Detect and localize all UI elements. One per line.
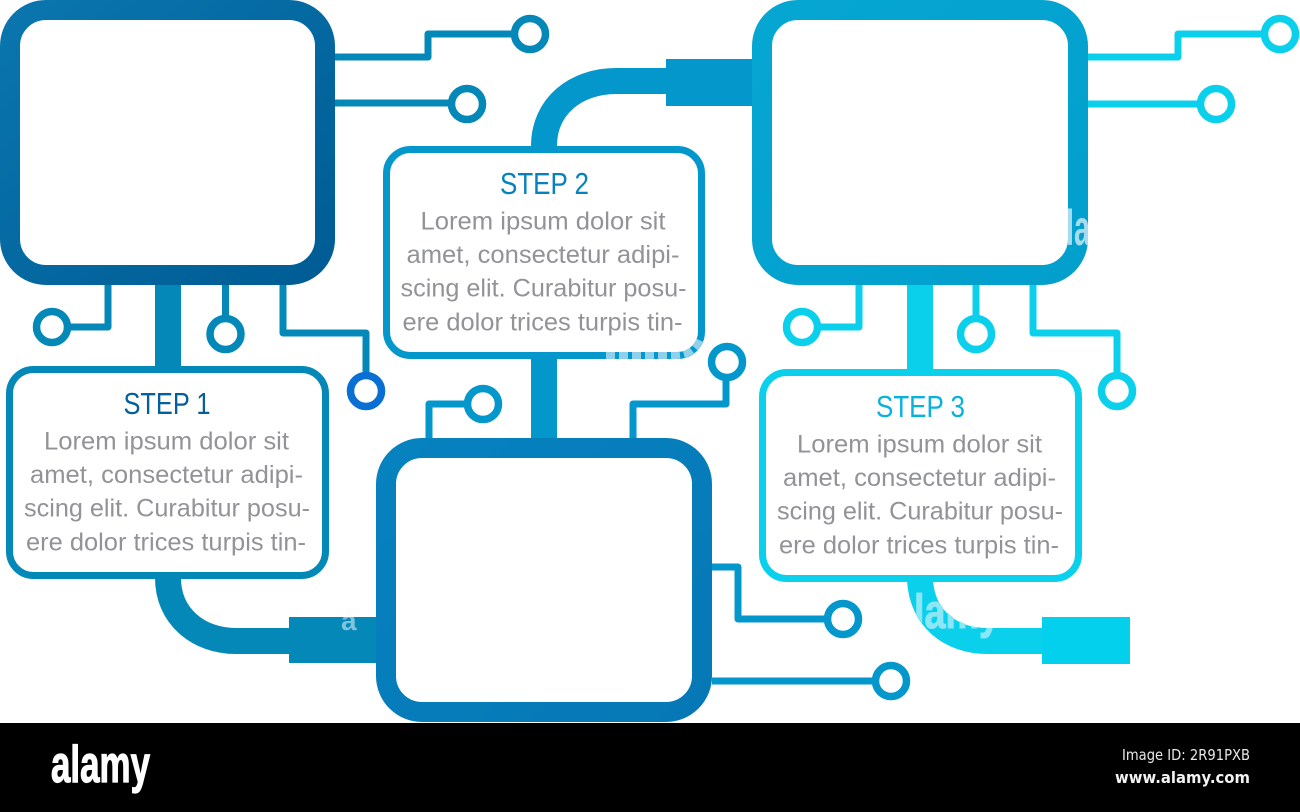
heading: step 2: STEP 2 <box>500 166 589 201</box>
icon: node circle bottom right <box>1102 376 1132 406</box>
panel: image square 2 <box>386 448 702 712</box>
connector: stem from step 2 to square 2 <box>531 356 557 442</box>
text block: step 1 body: ere dolor trices turpis tin- <box>26 528 306 556</box>
connector: pipe from step 1 to square 2 <box>168 576 300 641</box>
text block: step 3 body: scing elit. Curabitur posu- <box>777 498 1063 526</box>
text block: step 2 body: amet, consectetur adipi- <box>406 241 680 269</box>
text block: image id: Image ID: 2R91PXB <box>1122 746 1250 764</box>
panel: step 3 card <box>762 372 1078 578</box>
connector: step 1 traces <box>68 34 515 375</box>
panel: step 1 card <box>10 370 326 576</box>
text block: step 2 body: ere dolor trices turpis tin- <box>402 308 682 336</box>
panel: image square 1 <box>10 10 325 275</box>
connector: plug block step 1 <box>289 617 379 663</box>
icon: node circle bottom middle <box>960 318 992 350</box>
heading: step 3: STEP 3 <box>876 389 965 424</box>
panel: step 2 group <box>386 59 906 712</box>
panel: step 1 group <box>10 10 546 663</box>
panel: step 2 card <box>386 150 702 356</box>
text block: step 1 body: amet, consectetur adipi- <box>30 461 303 489</box>
text block: website: www.alamy.com <box>1115 768 1250 787</box>
text block: step 3 body: Lorem ipsum dolor sit <box>797 430 1042 458</box>
text block: step 3 body <box>777 430 1063 560</box>
icon: node circle bottom middle <box>210 318 241 350</box>
text block: step 2 body <box>400 208 686 336</box>
panel: image square 3 <box>762 10 1078 275</box>
icon: node circle top right 1 <box>514 18 546 50</box>
connector: pipe from step 2 to square 3 <box>544 81 680 148</box>
text block: step 3 body: amet, consectetur adipi- <box>783 464 1056 492</box>
text block: step 1 body: scing elit. Curabitur posu- <box>24 494 310 522</box>
footer: black stock photo bar <box>0 723 1300 812</box>
icon: node circle right 1 <box>828 604 858 634</box>
text block: watermark fragment on pipe: lamy <box>914 586 1000 639</box>
panel: step 3 group <box>762 10 1296 664</box>
connector: stem from square 3 to step 3 <box>907 283 933 373</box>
icon: node circle bottom left <box>36 312 68 342</box>
text block: alamy logo: alamy <box>51 736 150 794</box>
icon: node circle top right 2 <box>452 88 482 120</box>
connector: step 2 traces <box>429 378 875 681</box>
connector: stem from square 1 to step 1 <box>155 283 181 369</box>
heading: step 1: STEP 1 <box>124 386 210 421</box>
icon: node circle top right <box>712 346 742 378</box>
connector: plug block step 2 <box>666 59 756 106</box>
icon: node circle bottom left <box>786 312 818 342</box>
text block: step 2 body: scing elit. Curabitur posu- <box>400 274 686 302</box>
icon: node circle bottom right <box>350 376 382 406</box>
connector: pipe from step 3 <box>920 580 1050 641</box>
connector: plug block step 3 <box>1042 617 1130 664</box>
icon: node circle top left <box>468 388 498 420</box>
text block: step 3 body: ere dolor trices turpis tin- <box>779 532 1059 560</box>
connector: step 3 traces <box>818 34 1264 375</box>
text block: watermark fragment on square 3: la <box>1066 200 1091 256</box>
text block: step 1 body: Lorem ipsum dolor sit <box>44 428 289 456</box>
text block: step 2 body: Lorem ipsum dolor sit <box>420 208 666 236</box>
icon: node circle top right 1 <box>1264 18 1296 50</box>
icon: node circle right 2 <box>876 666 906 696</box>
text block: watermark fragment on plug: a <box>341 605 357 636</box>
icon: node circle top right 2 <box>1200 88 1232 120</box>
text block: step 1 body <box>24 428 310 556</box>
